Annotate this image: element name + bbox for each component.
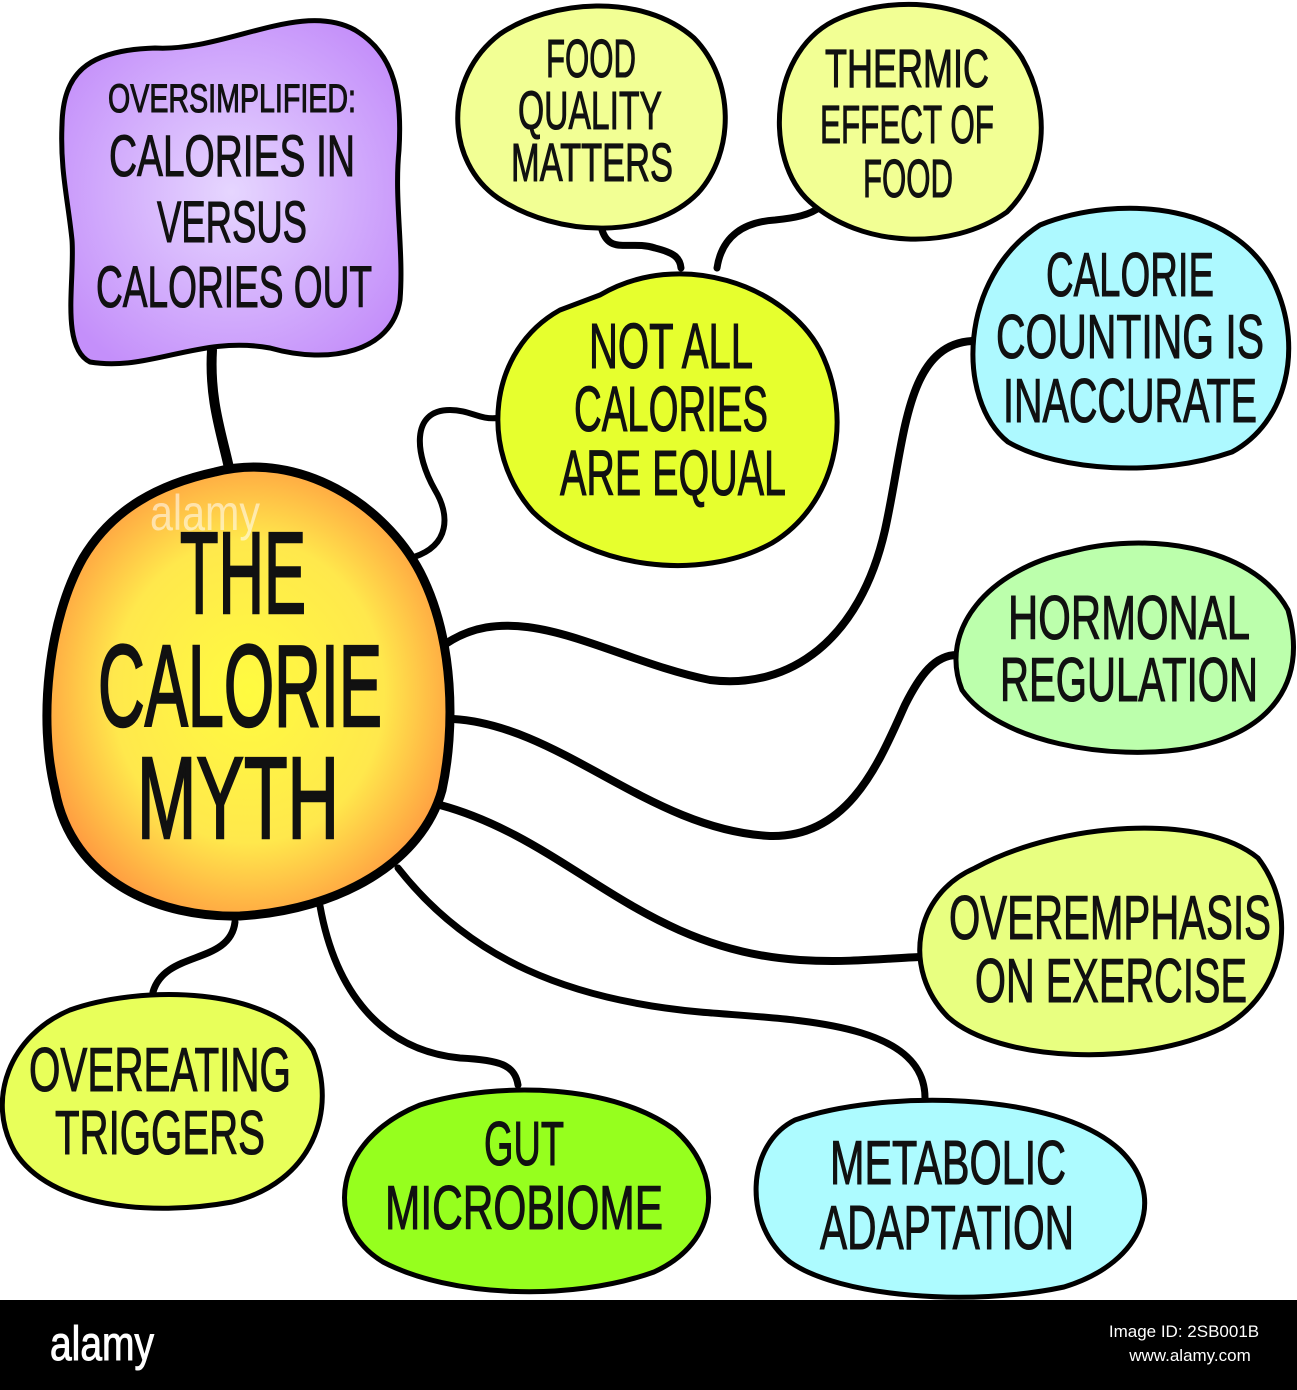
- text: overemphasis on exercise: [949, 884, 1271, 1016]
- text: thermic effect of food: EFFECT OF: [820, 95, 994, 155]
- panel: overeating triggers: [2, 995, 322, 1208]
- panel: not all calories are equal: [498, 274, 837, 566]
- panel: oversimplified: [62, 21, 401, 364]
- panel: food quality matters: [458, 6, 725, 228]
- text: metabolic adaptation: METABOLIC: [830, 1129, 1066, 1198]
- text: thermic effect of food: [820, 39, 994, 209]
- text: calorie counting is inaccurate: [996, 241, 1264, 436]
- panel: hormonal regulation: [956, 543, 1293, 752]
- text: website: www.alamy.com: [1128, 1346, 1251, 1365]
- panel: calorie counting is inaccurate: [973, 208, 1289, 468]
- logo: alamy: alamy: [50, 1318, 154, 1371]
- connector: center to oversimplified: [212, 350, 229, 468]
- connector: center to gut microbiome: [320, 906, 518, 1085]
- panel: overemphasis on exercise: [920, 828, 1282, 1055]
- text: versus: VERSUS: [157, 190, 307, 255]
- text: thermic effect of food: FOOD: [863, 149, 953, 209]
- text: food quality matters: FOOD: [546, 29, 636, 89]
- text: metabolic adaptation: ADAPTATION: [820, 1194, 1074, 1263]
- text: food quality matters: QUALITY: [518, 81, 662, 141]
- text: not all calories are equal: CALORIES: [574, 373, 768, 445]
- text: the calorie myth: CALORIE: [98, 621, 382, 751]
- text: thermic effect of food: THERMIC: [825, 39, 989, 99]
- connector: center to overeating triggers: [153, 922, 235, 992]
- text: not all calories are equal: NOT ALL: [589, 310, 753, 382]
- panel: central topic: [47, 467, 450, 916]
- text: overeating triggers: TRIGGERS: [55, 1099, 265, 1168]
- text: image id: Image ID: 2SB001B: [1109, 1322, 1259, 1341]
- text: calories in: CALORIES IN: [109, 124, 355, 189]
- connector: center to calorie counting: [447, 341, 972, 681]
- panel: thermic effect of food: [779, 4, 1041, 239]
- text: the calorie myth: THE: [180, 508, 306, 638]
- text: gut microbiome: [385, 1110, 663, 1243]
- connector: not all calories to food quality: [602, 230, 681, 268]
- text: calories out: CALORIES OUT: [96, 255, 372, 320]
- text: oversimplified heading: OVERSIMPLIFIED:: [108, 77, 356, 121]
- text: food quality matters: MATTERS: [511, 133, 673, 193]
- text: hormonal regulation: [1000, 584, 1258, 715]
- text: food quality matters: [511, 29, 673, 193]
- text: not all calories are equal: [560, 310, 786, 509]
- text: gut microbiome: GUT: [484, 1110, 564, 1179]
- connector: center to metabolic adaptation: [398, 868, 925, 1098]
- text: overeating triggers: OVEREATING: [29, 1036, 291, 1105]
- text: the calorie myth: [98, 508, 382, 863]
- connector: center to overemphasis: [440, 805, 920, 961]
- text: gut microbiome: MICROBIOME: [385, 1174, 663, 1243]
- connector: center to not all calories: [414, 410, 497, 557]
- footer bar: [0, 1300, 1297, 1390]
- text: overeating triggers: [29, 1036, 291, 1168]
- connector: not all calories to thermic effect: [717, 207, 820, 268]
- connector: center to hormonal regulation: [453, 655, 957, 836]
- text: the calorie myth: MYTH: [137, 733, 339, 863]
- text: metabolic adaptation: [820, 1129, 1074, 1263]
- panel: metabolic adaptation: [756, 1100, 1145, 1297]
- watermark: alamy: [150, 485, 260, 541]
- panel: gut microbiome: [345, 1090, 709, 1292]
- text: not all calories are equal: ARE EQUAL: [560, 437, 786, 509]
